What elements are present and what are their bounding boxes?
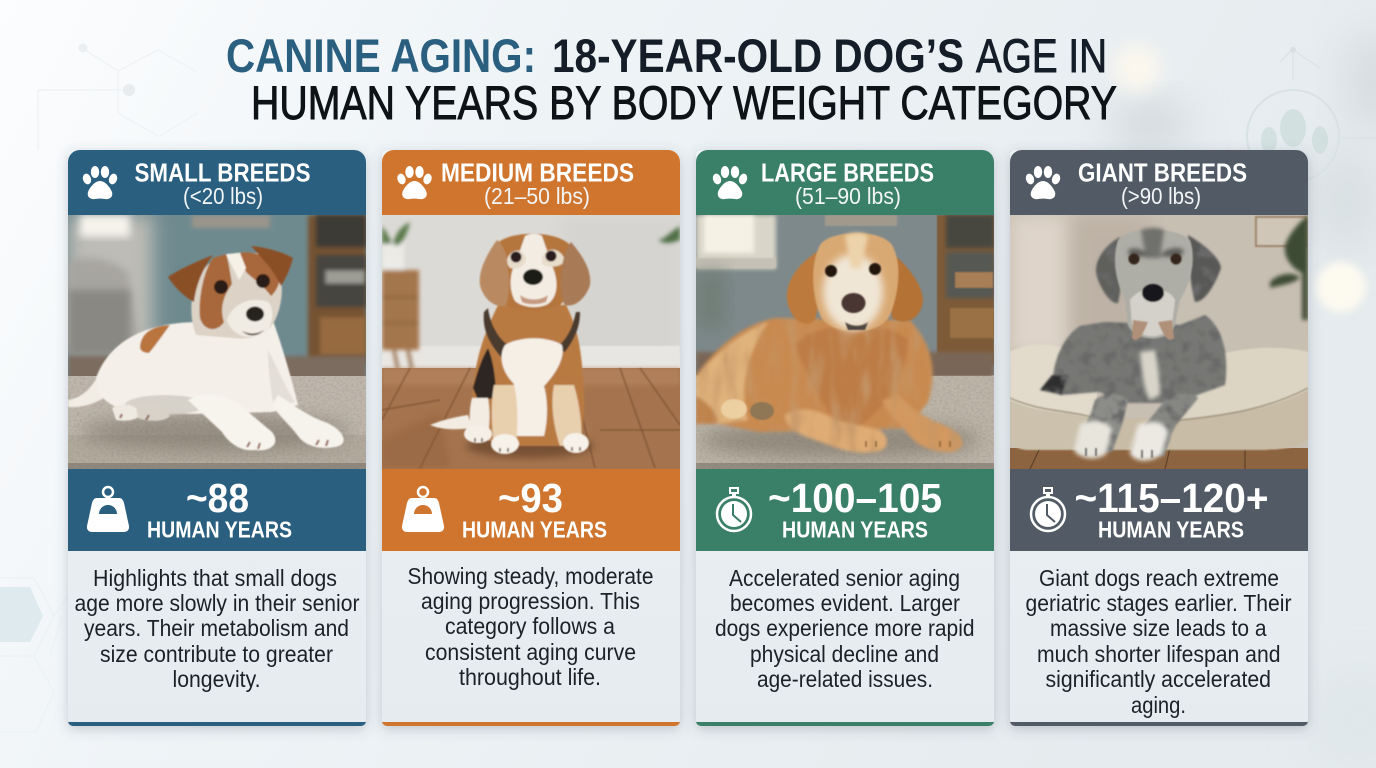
description: years. Their metabolism and	[84, 615, 349, 641]
description: aging.	[1131, 692, 1186, 718]
head	[498, 232, 570, 306]
unit: HUMAN YEARS	[462, 516, 607, 542]
muzzle	[227, 300, 272, 337]
description	[74, 565, 360, 692]
unit: HUMAN YEARS	[147, 516, 292, 542]
legs	[785, 410, 887, 453]
heading: large breeds: LARGE BREEDS	[761, 158, 934, 188]
description: becomes evident. Larger	[730, 590, 960, 616]
value: ~100–105	[768, 475, 942, 521]
ears	[480, 240, 509, 306]
head	[191, 252, 282, 339]
head	[1115, 230, 1193, 338]
haunch markings	[473, 348, 496, 400]
icon: stopwatch	[1031, 488, 1065, 531]
description	[408, 563, 654, 690]
title: 18-YEAR-OLD DOG’S	[552, 29, 964, 82]
value: ~93	[498, 475, 563, 521]
description: massive size leads to a	[1050, 615, 1267, 641]
ears	[1096, 237, 1122, 303]
nose	[1142, 284, 1164, 302]
tail	[430, 415, 472, 429]
description: category follows a	[445, 613, 616, 639]
icon: paw	[81, 166, 119, 199]
photo: golden retriever on rug	[696, 215, 994, 469]
heading: small breeds: SMALL BREEDS	[134, 158, 310, 188]
photo: small dog on rug	[68, 215, 366, 469]
unit: HUMAN YEARS	[1098, 516, 1244, 542]
body	[96, 321, 298, 415]
icon: stopwatch	[717, 488, 751, 531]
value: ~115–120+	[1074, 475, 1268, 521]
description: age-related issues.	[757, 666, 933, 692]
icon: paw	[1024, 166, 1062, 199]
header: medium breeds	[382, 150, 680, 215]
ears	[168, 255, 213, 302]
title: HUMAN YEARS BY BODY WEIGHT CATEGORY	[251, 76, 1117, 129]
eyes	[1128, 254, 1140, 264]
chest	[502, 338, 563, 436]
title: CANINE AGING:	[226, 29, 536, 82]
legs	[470, 398, 490, 438]
body	[696, 318, 962, 453]
header: giant breeds	[1010, 150, 1308, 215]
description	[715, 565, 974, 692]
description: consistent aging curve	[425, 639, 636, 665]
heading: medium breeds: MEDIUM BREEDS	[441, 158, 634, 188]
muzzle	[1130, 289, 1175, 336]
weight range: (<20 lbs)	[183, 183, 263, 209]
title: AGE IN	[976, 29, 1107, 82]
panel: giant breeds	[1010, 150, 1308, 726]
panel: large breeds	[696, 150, 994, 726]
eyes	[825, 265, 837, 277]
eyes	[510, 252, 522, 262]
body	[1040, 235, 1226, 456]
description: physical decline and	[750, 641, 939, 667]
description: dogs experience more rapid	[715, 615, 974, 641]
photo: beagle on wood floor	[382, 215, 680, 469]
header: large breeds	[696, 150, 994, 215]
description: throughout life.	[459, 664, 601, 690]
header: small breeds	[68, 150, 366, 215]
panel: small breeds	[68, 150, 366, 726]
legs	[188, 395, 275, 450]
title	[226, 29, 1117, 129]
icon: weight scale	[402, 487, 444, 532]
description: significantly accelerated	[1046, 666, 1271, 692]
weight range: (21–50 lbs)	[484, 183, 590, 209]
body	[471, 305, 584, 446]
value: ~88	[186, 475, 249, 521]
description: aging progression. This	[421, 588, 640, 614]
description: age more slowly in their senior	[74, 590, 360, 616]
description: much shorter lifespan and	[1037, 641, 1280, 667]
tail	[68, 380, 104, 408]
nose	[246, 306, 264, 322]
panel: medium breeds	[382, 150, 680, 726]
unit: HUMAN YEARS	[782, 516, 928, 542]
description: longevity.	[172, 666, 260, 692]
description: Accelerated senior aging	[729, 565, 960, 591]
stat: large breeds	[696, 469, 994, 551]
nose	[523, 269, 543, 285]
description: Giant dogs reach extreme	[1039, 565, 1279, 591]
stat: medium breeds	[382, 469, 680, 551]
dog bed	[1010, 345, 1308, 450]
stat: small breeds	[68, 469, 366, 551]
icon: weight scale	[87, 487, 129, 532]
head	[813, 233, 898, 332]
weight range: (51–90 lbs)	[795, 183, 901, 209]
description: geriatric stages earlier. Their	[1026, 590, 1292, 616]
description: size contribute to greater	[100, 641, 333, 667]
weight range: (>90 lbs)	[1121, 183, 1201, 209]
description: Highlights that small dogs	[93, 565, 337, 591]
eyes	[214, 280, 228, 294]
legs	[1086, 394, 1128, 453]
nose	[842, 293, 866, 313]
icon: paw	[711, 166, 749, 199]
icon: paw	[396, 166, 433, 199]
heading: giant breeds: GIANT BREEDS	[1078, 158, 1247, 188]
description: Showing steady, moderate	[408, 563, 654, 589]
photo: great dane on bed	[1010, 215, 1308, 469]
stat: giant breeds	[1010, 469, 1308, 551]
description	[1026, 565, 1292, 718]
ears	[787, 250, 822, 324]
